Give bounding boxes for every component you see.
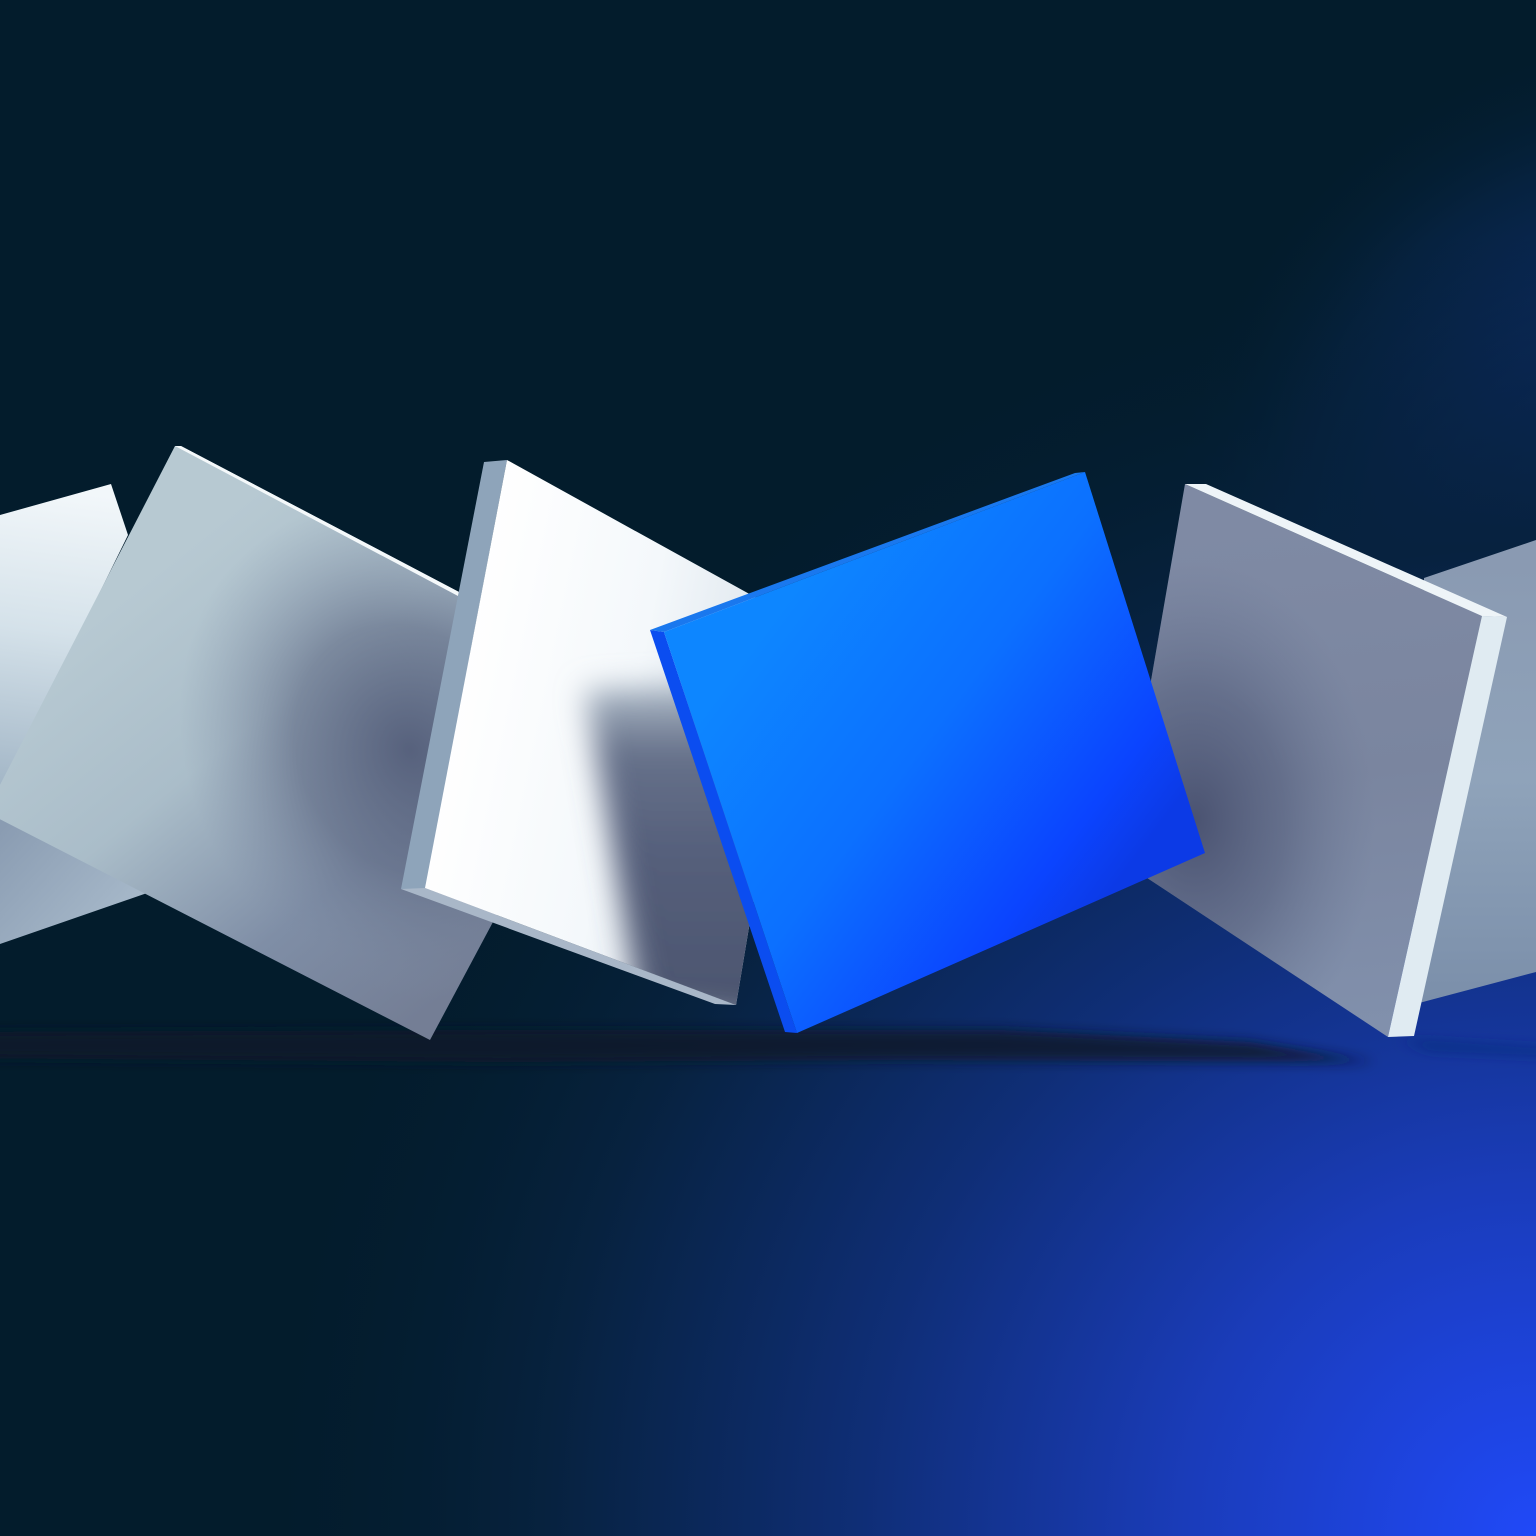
panel: large grey tilted <box>0 446 496 1040</box>
blue panel side edge <box>650 630 797 1033</box>
panel: far left, upper part <box>0 484 128 795</box>
blue panel top edge <box>650 472 1085 632</box>
ground shadow <box>0 1030 1536 1062</box>
panel: far left, lower part <box>0 812 150 944</box>
white panel bottom edge <box>401 888 736 1005</box>
panel: far right grey <box>1419 540 1536 1003</box>
white panel side edge <box>401 460 507 890</box>
panel: bright blue <box>650 472 1205 1033</box>
panel: white with shadow <box>401 460 756 1005</box>
grey panel top edge <box>1185 484 1507 617</box>
panel: grey right <box>1148 484 1507 1037</box>
grey panel side edge <box>1388 616 1507 1037</box>
